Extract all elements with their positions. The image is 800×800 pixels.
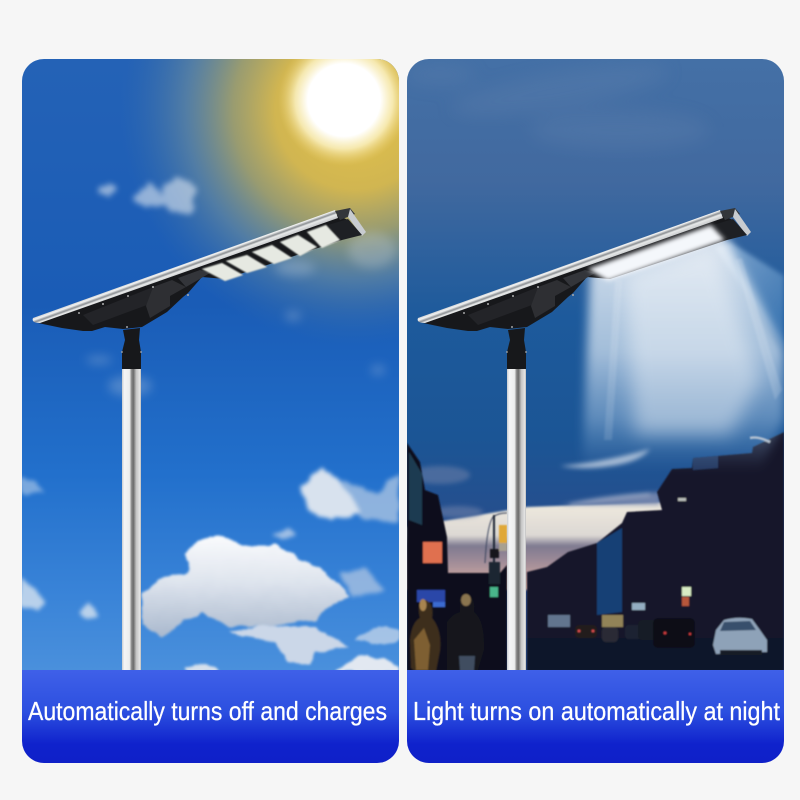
clouds: upper streaks: [493, 79, 686, 140]
sun: [282, 59, 399, 162]
dusk cloud bands: [410, 449, 660, 518]
large cumulus cloud: [142, 535, 399, 673]
white car: [713, 618, 767, 655]
clouds: upper: [98, 176, 198, 218]
clouds: right: [274, 468, 399, 598]
buildings left silhouette: [407, 443, 507, 671]
caption: day: Automatically turns off and charges: [28, 696, 387, 726]
blue building: [597, 528, 622, 615]
pole: [507, 365, 526, 671]
light beam: [582, 235, 784, 470]
parked cars: [575, 618, 695, 648]
sky background: [22, 59, 399, 671]
LED modules: [202, 225, 340, 281]
caption bar: [22, 670, 399, 763]
street light: [750, 438, 770, 442]
pole: [122, 365, 141, 671]
buildings right silhouette: [527, 432, 784, 645]
street lamp: [33, 208, 366, 369]
blue shop sign: [417, 590, 445, 602]
street sign: [423, 542, 442, 563]
city skyline: [407, 432, 784, 671]
lit LED modules: [588, 225, 725, 281]
sun glow: [140, 59, 399, 326]
shop lights: [548, 498, 691, 627]
clouds: left edge: [20, 478, 98, 620]
signal post: [485, 513, 507, 597]
panel: daytime: [20, 34, 410, 763]
clouds: faint near lamp: [86, 232, 396, 396]
panel: night: [405, 53, 784, 763]
pedestrians: [410, 594, 484, 671]
street lamp: [418, 208, 751, 369]
caption bar: [407, 670, 784, 763]
dusk sky: [407, 59, 784, 671]
horizon glow: [407, 502, 665, 590]
street with traffic: [527, 638, 784, 671]
